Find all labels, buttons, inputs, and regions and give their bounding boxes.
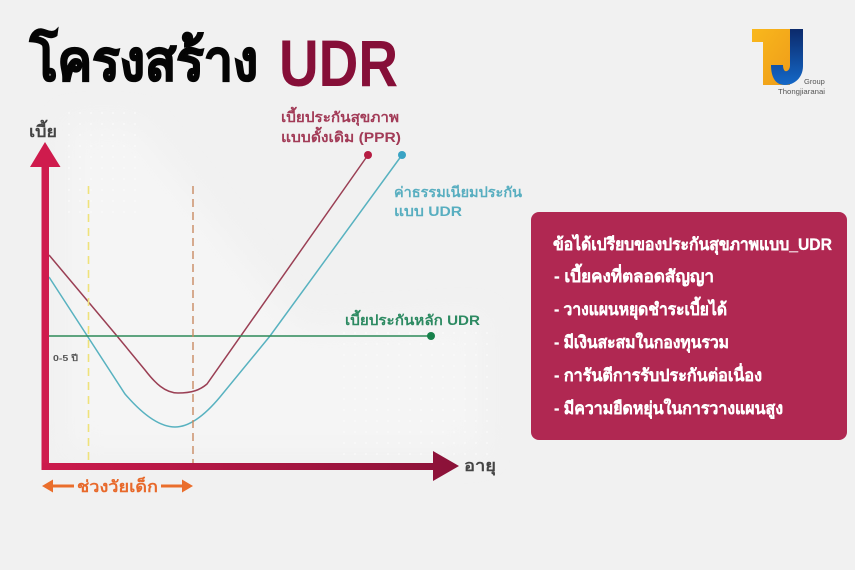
x axis label: อายุ xyxy=(464,458,496,476)
advantage 2: - วางแผนหยุดชำระเบี้ยได้ xyxy=(554,296,727,320)
title xyxy=(29,26,398,100)
label: UDR fee xyxy=(394,184,522,219)
logo: Thongjiaranai Group: Thongjiaranai xyxy=(778,87,825,96)
line: UDR main premium xyxy=(49,332,435,340)
childhood range arrow: ช่วงวัยเด็ก xyxy=(77,475,158,496)
logo: Thongjiaranai Group: Group xyxy=(804,77,825,86)
marker: childhood end dashed line xyxy=(192,186,194,463)
advantage 4: - การันตีการรับประกันต่อเนื่อง xyxy=(554,363,762,385)
title: UDR xyxy=(279,26,398,100)
logo: Thongjiaranai Group xyxy=(752,29,825,96)
marker: age 0-5 dashed line xyxy=(88,186,90,463)
label: UDR fee: แบบ UDR xyxy=(394,203,462,219)
label: PPR xyxy=(281,106,401,145)
label: PPR: เบี้ยประกันสุขภาพ xyxy=(281,106,399,126)
childhood range arrow xyxy=(42,475,193,496)
y axis arrow xyxy=(30,142,60,470)
label: UDR fee: ค่าธรรมเนียมประกัน xyxy=(394,184,522,200)
label: PPR: แบบดั้งเดิม (PPR) xyxy=(281,126,401,145)
advantage 1: - เบี้ยคงที่ตลอดสัญญา xyxy=(554,263,714,287)
x axis arrow xyxy=(42,451,459,481)
chart background dots xyxy=(60,112,490,460)
line: teal UDR fee curve xyxy=(49,151,406,427)
y axis label: เบี้ย xyxy=(29,119,57,141)
panel: UDR advantages xyxy=(531,212,847,440)
line: PPR premium curve xyxy=(49,151,372,393)
label: 0-5 years: 0-5 ปี xyxy=(53,353,79,363)
label: UDR main premium: เบี้ยประกันหลัก UDR xyxy=(345,309,480,328)
title: โครงสร้าง xyxy=(29,28,258,92)
advantage 3: - มีเงินสะสมในกองทุนรวม xyxy=(554,332,729,353)
panel heading: ข้อได้เปรียบของประกันสุขภาพแบบ_UDR xyxy=(553,234,832,255)
advantage 5: - มีความยืดหยุ่นในการวางแผนสูง xyxy=(554,398,783,420)
